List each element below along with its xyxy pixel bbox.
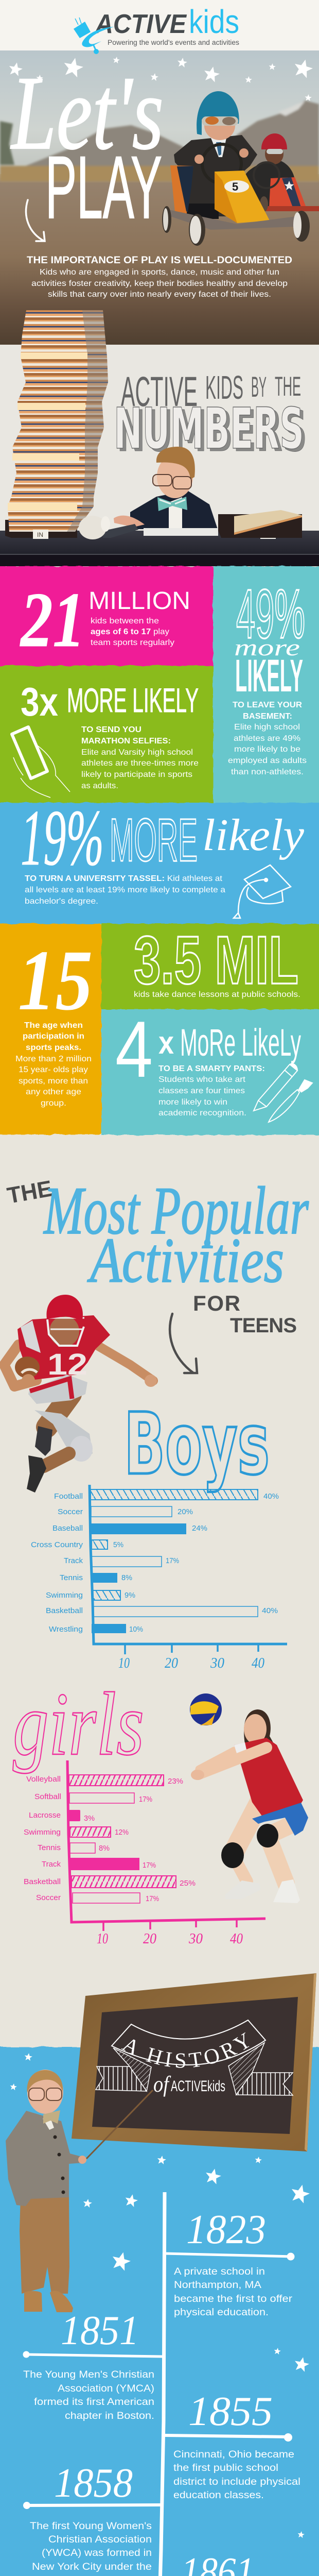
timeline event: 1823	[165, 2207, 294, 2318]
timeline event: 1858: (YWCA) was formed in	[42, 2547, 152, 2558]
bar: cross country	[31, 1540, 123, 1549]
bar: soccer	[58, 1506, 193, 1517]
heading: active kids by the numbers: ACTIVE	[121, 368, 198, 415]
bar: lacrosse	[29, 1810, 95, 1823]
panel: 3x more likely: as adults.	[81, 782, 118, 790]
timeline event: 1855: the first public school	[173, 2462, 278, 2473]
photo: volleyball player	[191, 1709, 308, 1903]
bar: basketball: Basketball	[46, 1606, 83, 1615]
mountains	[0, 100, 319, 181]
bar: soccer: 17%	[146, 1894, 159, 1903]
timeline event: 1858: Christian Association	[48, 2534, 152, 2545]
panel: 49% more likely: more likely to be	[234, 745, 300, 754]
banner: ACTIVEkids	[171, 2078, 225, 2095]
logo: ACTIVEkids	[74, 3, 239, 54]
bar: baseball: Baseball	[52, 1524, 83, 1533]
bar: softball: Softball	[34, 1792, 61, 1801]
panel: active kids by the numbers	[0, 310, 319, 566]
colour blocks	[0, 566, 319, 2576]
bar: soccer	[36, 1893, 159, 1903]
bar: cross country: Cross Country	[31, 1540, 83, 1549]
timeline event: 1851: 1851	[61, 2308, 139, 2353]
bar chart: boys	[31, 1485, 287, 1671]
bar: track: Track	[64, 1556, 83, 1565]
panel: age 15: any other age	[26, 1088, 81, 1096]
panel: hero photo	[0, 50, 319, 345]
panel: 4x more likely: classes are four times	[158, 1087, 245, 1095]
timeline event: 1851: Association (YMCA)	[58, 2383, 154, 2394]
panel: age 15: 15	[18, 933, 93, 1028]
bar chart: girls: 40	[230, 1931, 243, 1947]
timeline event: 1858: The first Young Women's	[30, 2520, 152, 2532]
bar chart: boys: 40	[252, 1655, 264, 1671]
timeline event: 1855: 1855	[188, 2389, 273, 2434]
bar: soccer: 20%	[178, 1507, 193, 1516]
heading: active kids by the numbers	[114, 368, 307, 464]
panel: age 15: sports peaks.	[26, 1043, 81, 1052]
title: Let's Play: Let's	[10, 55, 164, 172]
bar: swimming: Swimming	[46, 1591, 83, 1600]
panel: 19% more likely: bachelor's degree.	[25, 897, 98, 906]
text block: importance of play: THE IMPORTANCE OF PLAY IS WELL-DOCUMENTED	[27, 255, 292, 266]
timeline event: 1858	[23, 2461, 161, 2576]
bar: tennis: 8%	[121, 1573, 132, 1582]
heading: the most popular activities for teens: FOR	[193, 1291, 240, 1315]
panel: 3x more likely: TO SEND YOU	[81, 725, 141, 734]
photo: boy with pointer	[6, 2070, 153, 2312]
panel: 4x more likely: Students who take art	[158, 1075, 246, 1084]
bar: volleyball: 23%	[168, 1777, 183, 1786]
text block: importance of play: activities foster creativity, keep their bodies healthy and develop	[31, 279, 288, 288]
icon: pencil and brush	[254, 1064, 312, 1122]
bar: softball	[34, 1792, 152, 1804]
bar: lacrosse: Lacrosse	[29, 1811, 61, 1820]
icon: graduation cap	[234, 865, 291, 918]
heading: girls: girls	[13, 1674, 144, 1774]
bar: wrestling	[49, 1624, 143, 1634]
bar: wrestling: Wrestling	[49, 1625, 83, 1634]
panel: 4x more likely: TO BE A SMARTY PANTS:	[158, 1064, 265, 1073]
panel: age 15: participation in	[23, 1032, 84, 1041]
panel: 3x more likely: Elite and Varsity high school	[81, 748, 193, 757]
bar: track: 17%	[166, 1556, 179, 1565]
timeline event: 1851	[23, 2308, 163, 2421]
bar: football: 40%	[263, 1492, 279, 1501]
panel: 49% more likely: BASEMENT:	[243, 712, 292, 721]
banner: of	[153, 2072, 171, 2097]
bar: basketball: 25%	[180, 1879, 196, 1888]
panel: 3x more likely: likely to participate in sports	[81, 770, 192, 779]
text block: importance of play: Kids who are engaged in sports, dance, music and other fun	[40, 268, 279, 277]
timeline event: 1851: formed its first American	[34, 2396, 154, 2408]
panel: age 15: group.	[41, 1099, 66, 1108]
arrow: to boys	[170, 1314, 197, 1373]
icon: phone in hand	[12, 727, 70, 798]
paper stack	[5, 310, 108, 538]
timeline event: 1823: physical education.	[174, 2307, 269, 2318]
text block: importance of play: skills that carry over into nearly every facet of their lives.	[48, 290, 271, 299]
panel: 3x more likely: athletes are three-times more	[81, 759, 199, 768]
panel: header	[0, 0, 319, 51]
panel: 4x more likely: x	[158, 1025, 174, 1061]
title: Let's Play	[10, 55, 164, 237]
stars	[8, 56, 314, 101]
icon: robot	[74, 18, 114, 54]
panel: 21 million: ages of 6 to 17 play	[91, 628, 169, 636]
panel: 3x more likely: MORE LIKELY	[67, 681, 199, 719]
text block: importance of play	[27, 255, 292, 299]
go-kart kid 2	[244, 133, 319, 212]
panel: 49% more likely: TO LEAVE YOUR	[233, 701, 302, 709]
bar: football	[54, 1489, 279, 1501]
bar: cross country: 5%	[113, 1540, 123, 1549]
bar: swimming: Swimming	[24, 1828, 61, 1837]
photo: football player	[4, 1295, 157, 1493]
bar: swimming	[24, 1827, 129, 1837]
panel: age 15: More than 2 million	[15, 1055, 92, 1063]
heading: the most popular activities for teens: TEENS	[230, 1314, 297, 1337]
timeline event: 1855: district to include physical	[173, 2476, 300, 2487]
bar: lacrosse: 3%	[84, 1814, 95, 1823]
panel: 19% more likely	[21, 793, 305, 918]
panel: 49% more likely: Elite high school	[234, 723, 300, 732]
timeline event: 1858: New York City under the	[32, 2561, 152, 2572]
boy at desk with calculator	[79, 447, 218, 539]
bar: soccer: Soccer	[58, 1507, 83, 1516]
bar: swimming: 9%	[125, 1591, 135, 1600]
tray labels: OUT	[263, 531, 276, 538]
timeline event: 1851: chapter in Boston.	[65, 2410, 154, 2421]
timeline event: 1823: became the first to offer	[174, 2293, 293, 2304]
panel: 21 million: kids between the	[91, 617, 159, 625]
timeline event: 1858: 1858	[54, 2461, 133, 2506]
tray labels: IN	[37, 531, 43, 538]
bar chart: girls: 10	[97, 1931, 108, 1947]
bar chart: boys: 30	[210, 1655, 224, 1671]
bar: tennis: 8%	[99, 1844, 110, 1853]
panel: age 15: sports, more than	[19, 1077, 88, 1086]
bar chart: boys: 20	[165, 1655, 178, 1671]
panel: 21 million	[20, 577, 190, 663]
bar: track: Track	[42, 1860, 61, 1869]
bar: volleyball: Volleyball	[26, 1775, 61, 1784]
panel: 49% more likely: than non-athletes.	[231, 768, 304, 776]
stars: history section	[10, 2053, 311, 2576]
go-kart kid 1	[162, 91, 310, 246]
panel: 3x more likely: MARATHON SELFIES:	[81, 737, 171, 745]
bar: baseball	[52, 1523, 207, 1534]
out tray	[218, 510, 302, 538]
panel: age 15: 15 year- olds play	[19, 1065, 88, 1074]
timeline event: 1823: A private school in	[174, 2266, 265, 2277]
panel: 19% more likely: TO TURN A UNIVERSITY TASSEL: Kid athletes at	[25, 874, 223, 883]
panel: 49% more likely: employed as adults	[228, 756, 307, 765]
panel: 3.5 million dance: kids take dance lessons at public schools.	[134, 990, 300, 999]
title: Let's Play: PLAY	[45, 138, 162, 237]
panel: 49% more likely	[228, 575, 307, 776]
panel: 49% more likely: athletes are 49%	[234, 734, 300, 743]
timeline event: 1855	[165, 2389, 300, 2501]
bar: track	[64, 1556, 179, 1567]
bar chart: girls	[24, 1760, 265, 1947]
timeline event: 1855: Cincinnati, Ohio became	[173, 2449, 294, 2460]
bar: tennis: Tennis	[38, 1843, 61, 1852]
timeline axis	[150, 2192, 165, 2576]
bar: wrestling: 10%	[129, 1625, 143, 1634]
bar: football: Football	[54, 1492, 83, 1501]
bar: tennis	[60, 1573, 132, 1583]
bar: basketball	[46, 1606, 278, 1617]
arrow: hero	[26, 200, 45, 241]
bar: basketball: 40%	[262, 1606, 278, 1615]
heading: active kids by the numbers: KIDS	[205, 369, 243, 406]
bar chart: girls: 20	[143, 1931, 156, 1947]
bar: track: 17%	[143, 1861, 156, 1870]
bar: swimming: 12%	[115, 1828, 129, 1837]
panel: 19% more likely: all levels are at least 19% more likely to complete a	[25, 886, 225, 894]
bar: swimming	[46, 1590, 135, 1600]
heading: the most popular activities for teens	[5, 1173, 309, 1337]
panel: 3x more likely	[12, 679, 199, 798]
bar: soccer: Soccer	[36, 1893, 61, 1902]
heading: active kids by the numbers: BY	[251, 370, 267, 403]
heading: the most popular activities for teens: THE	[5, 1176, 54, 1209]
panel: 4x more likely: more likely to win	[158, 1098, 227, 1107]
bar chart: boys: 10	[118, 1655, 130, 1671]
icon: volleyball	[190, 1693, 222, 1725]
chalkboard: a history of activekids	[72, 1973, 316, 2151]
logo: ACTIVEkids: Powering the world's events and activities	[108, 39, 239, 46]
panel: 21 million: MILLION	[88, 587, 190, 615]
banner: A HISTORY	[121, 2032, 249, 2068]
tray labels	[33, 530, 276, 539]
bar: tennis: Tennis	[60, 1573, 83, 1582]
bar: track	[42, 1858, 156, 1870]
bar: softball: 17%	[139, 1795, 152, 1804]
logo: ACTIVEkids: ACTIVE	[94, 9, 187, 39]
panel: 4x more likely: 4	[115, 1005, 153, 1094]
bar: basketball: Basketball	[24, 1877, 61, 1886]
panel: 3x more likely: 3x	[21, 679, 58, 724]
go-kart kid 1: 5	[232, 180, 238, 193]
bar: baseball: 24%	[192, 1524, 207, 1533]
desk	[0, 531, 319, 566]
bar: basketball	[24, 1876, 196, 1888]
panel: age 15: The age when	[24, 1021, 83, 1030]
bar: tennis	[38, 1843, 110, 1853]
bar: volleyball	[26, 1775, 183, 1786]
panel: 19% more likely: 19%	[21, 793, 104, 882]
photo: football player: 12	[47, 1348, 87, 1381]
timeline event: 1855: education classes.	[173, 2489, 264, 2501]
banner	[95, 2020, 293, 2097]
panel: 4x more likely	[115, 1005, 312, 1122]
panel: age 15	[15, 933, 93, 1108]
panel: 4x more likely: academic recognition.	[158, 1109, 246, 1117]
panel: 49% more likely: more	[234, 634, 300, 660]
panel: 21 million: team sports regularly	[91, 638, 174, 647]
bar chart: girls: 30	[188, 1931, 203, 1947]
panel: 21 million: 21	[20, 577, 85, 663]
timeline event: 1823: Northampton, MA	[174, 2279, 261, 2291]
panel: 19% more likely: MORE	[110, 806, 198, 874]
timeline event: 1851: The Young Men's Christian	[23, 2369, 154, 2380]
timeline event: 1823: 1823	[186, 2207, 266, 2252]
panel: 19% more likely: likely	[202, 810, 305, 860]
logo: ACTIVEkids: kids	[189, 3, 239, 40]
